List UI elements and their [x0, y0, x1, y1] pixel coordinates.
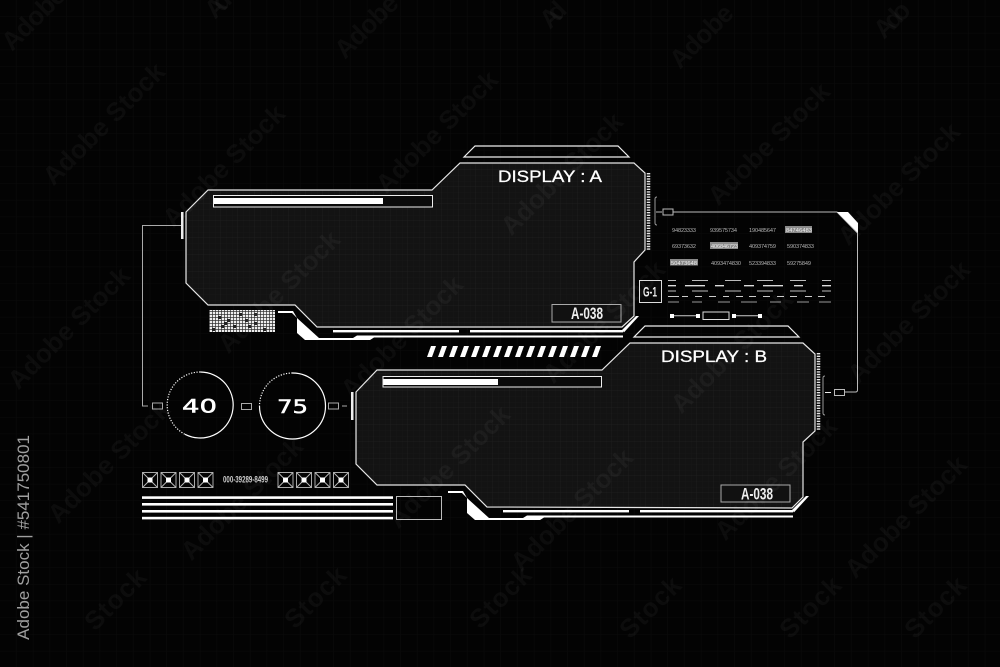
hatched stripe bar — [427, 346, 601, 357]
crossed boxes right — [278, 472, 348, 488]
connector box bottom — [834, 390, 844, 396]
number table: 50473648 — [671, 261, 697, 267]
gauge: 40: 40 — [182, 396, 217, 418]
pixel grid block — [209, 310, 275, 332]
panel B code tag — [721, 484, 790, 504]
stock watermarks: Adobe Stock — [334, 269, 469, 404]
stock watermarks: Stock — [613, 570, 688, 644]
number table: 523394833 — [749, 261, 776, 267]
panel: display B — [356, 326, 818, 520]
left connector bracket — [142, 212, 184, 406]
number table: 590374833 — [787, 244, 814, 250]
panel B title: DISPLAY : B — [661, 347, 767, 366]
serial number: 000-39289-8499 — [223, 474, 268, 484]
stock watermarks: Stock — [278, 560, 353, 634]
connector box top — [663, 209, 673, 215]
slider widget — [670, 312, 762, 320]
stock watermarks: Adobe Stock — [41, 394, 176, 529]
stock watermarks: Adobe Stock — [369, 64, 504, 199]
stock watermarks: Adobe Stock — [664, 284, 799, 419]
module top-left bracket — [655, 197, 657, 225]
number table: 190485647 — [749, 228, 776, 234]
stock watermarks: Adobe Stock — [494, 106, 629, 241]
panel B side bar — [351, 392, 354, 420]
stock watermarks: Adobe Stock — [841, 254, 976, 389]
connector tick — [825, 392, 831, 394]
four horizontal bars — [142, 496, 393, 519]
stock watermarks: Adobe Stock — [1, 260, 136, 395]
panel A trapezoid header — [464, 146, 629, 157]
module frame connector — [656, 212, 858, 392]
connector tick — [342, 405, 347, 407]
gauge row — [152, 372, 354, 439]
number table: 84746483 — [786, 228, 812, 234]
stock watermarks: Adobe Stock — [838, 449, 973, 584]
stock watermarks: Stock — [78, 562, 153, 636]
panel: display A — [186, 146, 648, 340]
stock watermarks: Adobe Stock — [701, 76, 836, 211]
dashed data lines — [668, 280, 831, 302]
panel A code tag: A-038 — [571, 304, 603, 323]
stock watermarks: Adobe Stock — [708, 411, 843, 546]
module bottom bracket — [823, 376, 825, 415]
stock watermarks: Adobe Stock — [156, 98, 291, 233]
panel B code tag: A-038 — [741, 484, 773, 504]
small connector box 1 — [152, 403, 162, 409]
G-1 tag: G-1 — [643, 284, 657, 300]
small connector box 3 — [328, 403, 338, 409]
panel A title: DISPLAY : A — [498, 167, 603, 186]
stock watermarks: Adobe Stock — [504, 442, 639, 577]
stock watermarks: Adobe Stock — [36, 56, 171, 191]
number table: 939575734 — [710, 228, 737, 234]
panel B trapezoid header — [634, 326, 799, 337]
gauge: 75 — [260, 373, 326, 439]
empty outlined box — [396, 496, 442, 520]
stock watermarks: Adobe Stock — [211, 224, 346, 359]
panel A vertical ladder — [647, 173, 650, 250]
small connector box 2 — [242, 404, 252, 410]
G-1 tag — [640, 280, 662, 302]
white corner wedge — [837, 212, 858, 233]
stock watermarks: Stock — [898, 570, 973, 644]
panel B vertical ladder — [817, 353, 820, 430]
stock watermarks: Adobe Stock — [831, 116, 966, 251]
stock watermarks: Adobe Stock — [174, 431, 309, 566]
panel B progress bar — [383, 376, 602, 387]
highlighted cells — [670, 226, 812, 266]
number table: 4093474830 — [711, 261, 741, 267]
stock watermarks: Adobe Stock — [381, 399, 516, 534]
number table — [670, 226, 814, 267]
gauge: 75: 75 — [277, 396, 308, 418]
stock watermarks: Stock — [773, 570, 848, 644]
panel A code tag — [552, 304, 621, 323]
right data module — [640, 197, 858, 415]
panel A progress bar — [214, 196, 432, 207]
number table: 59275849 — [787, 261, 811, 267]
gauge: 40 — [167, 372, 233, 438]
stock watermarks: Adobe — [663, 0, 739, 74]
number table: 69373632 — [672, 244, 696, 250]
panel B bottom trim — [448, 491, 809, 520]
number table: 409374759 — [749, 244, 776, 250]
crossed boxes left — [142, 472, 213, 488]
number table: 94823333 — [672, 228, 696, 234]
stock id vertical text: Adobe Stock | #541750801 — [14, 435, 33, 640]
panel A frame — [186, 163, 645, 327]
panel A bottom trim — [278, 311, 639, 340]
stock watermarks: Stock — [463, 560, 538, 634]
panel B frame — [356, 343, 815, 508]
number table: 406846723 — [711, 244, 738, 250]
stock watermarks: Adobe Stock — [536, 254, 671, 389]
